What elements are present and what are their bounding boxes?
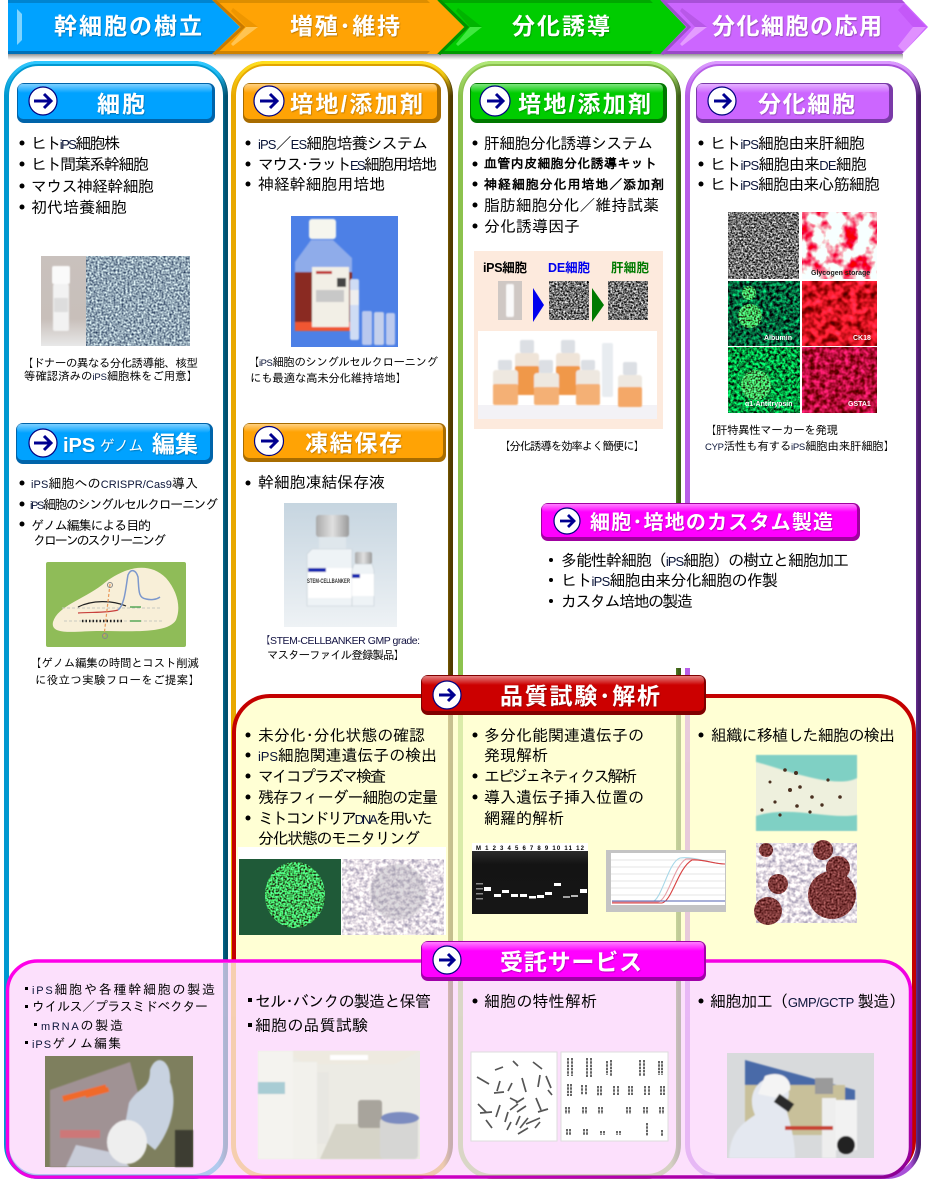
image: cell banker bottles (284, 503, 397, 627)
list: quality tests column 4: 組織に移植した細胞の検出 (711, 727, 895, 745)
caption: cell lines: 【ドナーの異なる分化誘導能、核型 (22, 356, 198, 370)
heading: 培地/添加剤 (orange): 培地/添加剤 (290, 91, 423, 117)
image: iPS vial and cell culture (41, 256, 190, 346)
list: quality tests column 2: 未分化･分化状態の確認 (258, 727, 425, 745)
panel: column 1 frame (6, 64, 226, 1176)
list: quality tests column 3 (472, 727, 644, 828)
caption: media: 【iPS細胞のシングルセルクローニング (248, 356, 438, 369)
list: cell products: ヒトiPS細胞株 (31, 135, 120, 153)
heading: iPS ゲノム編集: iPS (63, 435, 95, 457)
list: contract services column 1: iPS細胞や各種幹細胞の製造 (32, 982, 215, 997)
chevron: 幹細胞の樹立 (8, 0, 243, 54)
heading: 培地/添加剤 (orange) (243, 83, 441, 123)
panel: contract services background (8, 961, 910, 1177)
panel: quality testing background (234, 696, 914, 1176)
photo: cell storage room (258, 1051, 420, 1159)
heading: 培地/添加剤 (green): 培地/添加剤 (518, 91, 651, 117)
column 2: cryopreservation section (243, 423, 446, 662)
image grid: hepatocyte staining micrographs: α1-Antitrypsin (745, 401, 792, 408)
panel: column 4 frame (688, 64, 918, 1176)
image: fluorescent colony and stained tissue (238, 847, 446, 935)
panel: differentiation workflow image: iPS細胞 (483, 260, 527, 275)
list: differentiated cell types (698, 135, 880, 194)
heading: 凍結保存: 凍結保存 (305, 430, 402, 456)
column 2: culture media section (243, 83, 441, 385)
caption: hepatocytes: CYP活性も有するiPS細胞由来肝細胞】 (705, 440, 895, 453)
chart: amplification curves (606, 850, 726, 912)
list: differentiation products: 神経細胞分化用培地／添加剤 (484, 177, 664, 192)
list: quality tests column 2 (246, 727, 438, 848)
heading: 品質試験・解析 (421, 675, 706, 715)
heading: 分化細胞 (696, 83, 893, 123)
heading: 品質試験・解析: 品質試験･解析 (500, 683, 660, 709)
list: differentiated cell types: ヒトiPS細胞由来肝細胞 (710, 135, 865, 153)
list: custom manufacturing: カスタム培地の製造 (561, 594, 693, 611)
panel: differentiation workflow image: DE細胞 (548, 260, 590, 275)
image grid: hepatocyte staining micrographs: CK18 (853, 335, 871, 342)
caption: cell banker: 【STEM-CELLBANKER GMP grade: (260, 635, 420, 647)
caption: cell lines: 等確認済みのiPS細胞株をご用意】 (24, 370, 198, 383)
list: quality tests column 2: 分化状態のモニタリング (258, 830, 420, 848)
column 1: cells section (17, 83, 215, 383)
process chevron banner (8, 0, 928, 60)
quality testing section (238, 675, 895, 935)
caption: hepatocytes: 【肝特異性マーカーを発現 (705, 424, 838, 437)
list: differentiation products: 脂肪細胞分化／維持試薬 (484, 197, 659, 215)
image: CRISPR diagram (46, 562, 186, 647)
caption: media: にも最適な高未分化維持培地】 (250, 372, 407, 385)
list: media products: マウス･ラットES細胞用培地 (258, 156, 437, 174)
chevron: 分化誘導 (437, 0, 689, 54)
list: contract services column 2 (248, 993, 431, 1035)
list: quality tests column 2: 残存フィーダー細胞の定量 (258, 789, 438, 807)
list: cell products: マウス神経幹細胞 (31, 177, 154, 196)
heading: iPS ゲノム編集: 編集 (152, 431, 198, 457)
list: quality tests column 3: 多分化能関連遺伝子の (484, 727, 644, 745)
heading: 細胞・培地のカスタム製造 (541, 503, 860, 541)
list: custom manufacturing: 多能性幹細胞（iPS細胞）の樹立と細胞加工 (561, 552, 849, 570)
image: culture medium flask (291, 216, 398, 347)
list: custom manufacturing (549, 552, 849, 611)
custom manufacturing section (541, 503, 860, 611)
image grid: hepatocyte staining micrographs: GSTA1 (848, 401, 871, 408)
chevron: 分化細胞の応用: 分化細胞の応用 (712, 13, 882, 39)
list: quality tests column 3: 発現解析 (484, 747, 548, 765)
list: quality tests column 3: 網羅的解析 (484, 810, 564, 828)
heading: 培地/添加剤 (green) (470, 83, 667, 123)
list: differentiated cell types: ヒトiPS細胞由来DE細胞 (710, 156, 867, 174)
chevron: 分化誘導: 分化誘導 (512, 13, 610, 39)
heading: iPS ゲノム編集: ゲノム (100, 438, 143, 455)
image: chromosome spread (471, 1052, 557, 1141)
panel: column 2 frame (234, 64, 450, 1176)
heading: 細胞・培地のカスタム製造: 細胞･培地のカスタム製造 (590, 511, 833, 534)
panel: differentiation workflow image: 肝細胞 (611, 260, 649, 275)
image: karyotype (561, 1052, 668, 1141)
column 4: differentiated cells section (696, 83, 895, 453)
heading: 分化細胞: 分化細胞 (758, 91, 855, 117)
panel: column 3 frame (460, 64, 678, 1176)
caption: genome editing (30, 657, 200, 687)
list: genome editing services (20, 476, 218, 548)
photo: technicians at safety cabinet (45, 1056, 193, 1167)
heading: 細胞: 細胞 (97, 91, 145, 117)
contract services section (25, 941, 905, 1167)
image grid: hepatocyte staining micrographs (728, 212, 877, 413)
list: contract services column 1: iPSゲノム編集 (32, 1036, 121, 1051)
heading: 細胞 (17, 83, 215, 123)
list: quality tests column 2: iPS細胞関連遺伝子の検出 (258, 747, 437, 765)
list: cryopreservation: 幹細胞凍結保存液 (258, 474, 385, 492)
chevron: 増殖・維持 (212, 0, 467, 54)
list: differentiation products: 血管内皮細胞分化誘導キット (484, 156, 657, 171)
chevron: 幹細胞の樹立: 幹細胞の樹立 (54, 13, 202, 39)
list: differentiation products (472, 135, 664, 236)
list: contract services column 2: 細胞の品質試験 (255, 1017, 368, 1035)
caption: cell lines (22, 356, 198, 383)
list: genome editing services: iPS細胞のシングルセルクローニング (30, 497, 218, 512)
list: differentiation products: 肝細胞分化誘導システム (484, 135, 653, 153)
list: contract services column 4: 細胞加工（GMP/GCTP 製造） (710, 993, 905, 1011)
list: media products (246, 135, 437, 194)
caption: hepatocytes (705, 424, 895, 453)
image: electrophoresis gel: M 1 2 3 4 5 6 7 8 9 10 11 12 (476, 846, 585, 852)
list: contract services column 1 (25, 982, 215, 1051)
heading: iPS ゲノム編集 (16, 423, 213, 464)
caption: genome editing: 【ゲノム編集の時間とコスト削減 (30, 657, 199, 670)
caption: differentiation: 【分化誘導を効率よく簡便に】 (499, 440, 645, 453)
panel: differentiation workflow image (474, 251, 663, 429)
list: contract services column 3: 細胞の特性解析 (484, 993, 597, 1011)
image: electrophoresis gel (472, 843, 588, 914)
list: contract services column 1: mRNAの製造 (41, 1018, 123, 1033)
image: transplanted tissue stain (756, 755, 857, 831)
caption: media (248, 356, 438, 385)
column 3: differentiation section (470, 83, 667, 453)
heading: 受託サービス (421, 941, 706, 981)
list: genome editing services: iPS細胞へのCRISPR/Cas9導入 (31, 476, 198, 491)
image: tissue stain (754, 840, 857, 925)
column 1: genome editing section (16, 423, 218, 687)
caption: cell banker (260, 635, 420, 662)
caption: genome editing: に役立つ実験フローをご提案】 (35, 674, 200, 687)
list: differentiation products: 分化誘導因子 (484, 218, 580, 236)
image: cell banker bottles: STEM-CELLBANKER (307, 579, 350, 585)
list: contract services column 2: セル･バンクの製造と保管 (255, 993, 431, 1011)
heading: 受託サービス: 受託サービス (500, 949, 642, 975)
chevron: 分化細胞の応用 (660, 0, 928, 54)
list: custom manufacturing: ヒトiPS細胞由来分化細胞の作製 (561, 572, 778, 590)
list: contract services column 1: ウイルス／プラスミドベクター (32, 999, 208, 1014)
caption: cell banker: マスターファイル登録製品】 (267, 649, 405, 662)
list: cell products: 初代培養細胞 (31, 199, 127, 217)
image grid: hepatocyte staining micrographs: Albumin (764, 335, 792, 342)
list: genome editing services: ゲノム編集による目的 (31, 518, 151, 533)
list: quality tests column 2: マイコプラズマ検査 (258, 768, 386, 786)
list: media products: iPS／ES細胞培養システム (258, 135, 428, 153)
list: quality tests column 3: 導入遺伝子挿入位置の (484, 789, 644, 807)
photo: microscope operator (727, 1053, 874, 1158)
list: cell products (20, 135, 154, 217)
list: genome editing services: クローンのスクリーニング (33, 533, 166, 548)
list: media products: 神経幹細胞用培地 (258, 175, 385, 194)
heading: 凍結保存 (243, 423, 446, 462)
list: quality tests column 2: ミトコンドリアDNAを用いた (258, 810, 433, 828)
list: quality tests column 3: エピジェネティクス解析 (484, 768, 637, 786)
list: differentiated cell types: ヒトiPS細胞由来心筋細胞 (710, 176, 880, 194)
chevron: 増殖・維持: 増殖･維持 (290, 13, 400, 39)
list: cell products: ヒト間葉系幹細胞 (31, 156, 149, 174)
image grid: hepatocyte staining micrographs: Glycogen storage (811, 270, 870, 277)
